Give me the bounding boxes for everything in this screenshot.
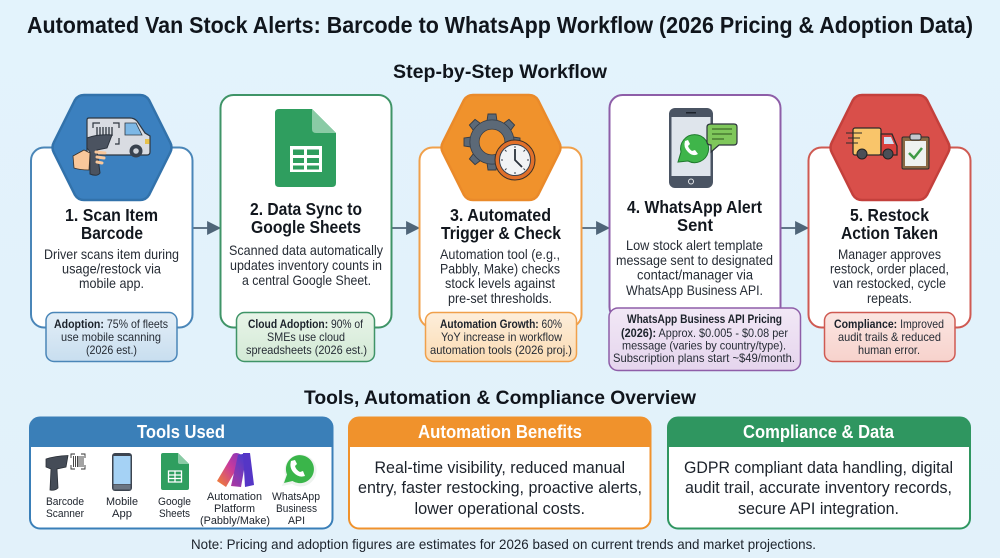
heading: step-by-step workflow: Step-by-Step Workflow (393, 61, 608, 83)
panel: tools used (30, 418, 332, 528)
text: step 5 description: van restocked, cycle (833, 276, 946, 291)
icon: barcode scanner (46, 454, 85, 490)
label: google sheets (158, 496, 191, 520)
label: whatsapp business api: Business (276, 503, 317, 515)
callout: adoption: Adoption: 75% of fleets (54, 317, 168, 331)
heading: automation benefits: Automation Benefits (418, 422, 582, 442)
arrow: step 2 to 3 (392, 222, 418, 234)
callout: whatsapp pricing: (2026): Approx. $0.005 - $0.08 per (621, 326, 788, 340)
panel: step 2 data sync (220, 95, 392, 362)
label: mobile app (106, 496, 138, 520)
text: automation benefits: Real-time visibility, reduced manual (374, 458, 625, 477)
callout: adoption (46, 312, 177, 362)
label: automation platform (200, 491, 270, 527)
callout: cloud adoption: Cloud Adoption: 90% of (248, 317, 364, 331)
label: barcode scanner: Barcode (46, 496, 84, 508)
text: step 1 description: usage/restock via (62, 262, 161, 276)
icon: google sheets (275, 109, 336, 187)
text: automation benefits (358, 458, 642, 518)
callout: automation growth: YoY increase in workflow (441, 330, 562, 344)
text: step 1 description: mobile app. (79, 276, 144, 291)
text: step 2 description (229, 243, 383, 288)
arrow: step 4 to 5 (781, 222, 807, 234)
icon: google sheets small (161, 453, 189, 490)
heading: step 5: 5. Restock (850, 205, 929, 225)
panel: step 2 data sync: Google Sheets (251, 217, 361, 237)
label: mobile app: Mobile (106, 496, 138, 508)
callout: compliance: audit trails & reduced (838, 330, 941, 344)
text: step 3 description (440, 247, 560, 306)
label: google sheets: Google (158, 496, 191, 508)
text: automation benefits: lower operational costs. (414, 499, 585, 518)
heading: step 3: 3. Automated (450, 205, 551, 225)
callout: cloud adoption: spreadsheets (2026 est.) (246, 343, 367, 357)
footnote: Note: Pricing and adoption figures are estimates for 2026 based on current trends and market projections. (191, 537, 816, 552)
text: compliance and data: audit trail, accurate inventory records, (685, 478, 952, 497)
label: automation platform: Automation (207, 491, 262, 503)
label: mobile app: App (112, 508, 132, 520)
callout: cloud adoption (236, 312, 374, 362)
label: whatsapp business api: API (288, 515, 305, 527)
text: step 3 description: pre-set thresholds. (448, 291, 552, 306)
callout: compliance: human error. (858, 343, 920, 357)
panel: step 4 whatsapp alert: Sent (677, 215, 713, 235)
panel: step 1 scan item barcode: Barcode (81, 223, 143, 243)
text: step 5 description: repeats. (867, 291, 912, 306)
panel: step 5 restock action (808, 95, 970, 362)
text: step 1 description: Driver scans item during (44, 247, 179, 262)
panel: step 3 automated trigger (420, 95, 582, 362)
panel: step 5 restock action: Action Taken (841, 223, 938, 243)
icon: automation platform logo (217, 453, 254, 487)
text: compliance and data: GDPR compliant data handling, digital (684, 458, 953, 477)
text: step 4 description: Low stock alert template (626, 238, 763, 253)
callout: whatsapp pricing (609, 308, 800, 370)
label: whatsapp business api: WhatsApp (272, 491, 320, 503)
heading: step 1: 1. Scan Item (65, 205, 158, 225)
icon: blue hexagon (52, 95, 172, 200)
label: automation platform: (Pabbly/Make) (200, 515, 270, 527)
arrow: step 1 to 2 (193, 222, 219, 234)
text: step 3 description: Pabbly, Make) checks (440, 262, 560, 276)
text: step 4 description: WhatsApp Business API. (626, 283, 763, 298)
callout: whatsapp pricing: WhatsApp Business API Pricing (627, 312, 782, 326)
heading: tools overview: Tools, Automation & Compliance Overview (304, 387, 697, 409)
text: step 1 description (44, 247, 179, 291)
text: step 2 description: a central Google Sheet. (242, 273, 371, 288)
heading: tools used: Tools Used (137, 422, 225, 442)
panel: automation benefits (349, 418, 650, 528)
text: step 5 description (830, 247, 949, 306)
callout: automation growth (426, 312, 576, 362)
icon: gear and clock (464, 114, 535, 180)
text: compliance and data: secure API integration. (738, 499, 899, 518)
label: automation platform: Platform (214, 503, 255, 515)
panel: step 3 automated trigger: Trigger & Check (441, 223, 561, 243)
text: step 3 description: Automation tool (e.g., (440, 247, 560, 262)
panel: step 1 scan item barcode (31, 95, 192, 362)
text: automation benefits: entry, faster restocking, proactive alerts, (358, 478, 642, 497)
label: whatsapp business api (272, 491, 320, 527)
text: step 4 description: message sent to designated (616, 253, 773, 268)
callout: whatsapp pricing: message (varies by country/type). (622, 338, 786, 352)
icon: mobile app phone (112, 453, 132, 491)
label: barcode scanner: Scanner (46, 508, 84, 520)
panel: compliance and data (668, 418, 970, 528)
icon: whatsapp logo (282, 454, 317, 486)
icon: phone with whatsapp and chat bubble (669, 108, 737, 188)
callout: compliance (824, 312, 955, 362)
text: step 2 description: Scanned data automatically (229, 243, 383, 258)
text: step 4 description (616, 238, 773, 298)
label: barcode scanner (46, 496, 84, 520)
icon: red hexagon (830, 95, 950, 200)
heading: step 2: 2. Data Sync to (250, 199, 362, 219)
heading: step 4: 4. WhatsApp Alert (627, 197, 762, 217)
panel: step 4 whatsapp alert (609, 95, 800, 370)
callout: whatsapp pricing: Subscription plans start ~$49/month. (613, 351, 795, 365)
icon: orange hexagon (442, 95, 560, 200)
callout: automation growth: automation tools (2026 proj.) (430, 343, 572, 357)
callout: compliance: Compliance: Improved (834, 317, 944, 331)
text: step 2 description: updates inventory counts in (230, 258, 382, 273)
arrow: step 3 to 4 (582, 222, 608, 234)
text: compliance and data (684, 458, 953, 518)
callout: adoption: (2026 est.) (86, 343, 137, 357)
text: step 3 description: stock levels against (445, 276, 555, 291)
text: step 5 description: restock, order placed, (830, 262, 949, 276)
callout: automation growth: Automation Growth: 60% (440, 317, 562, 331)
icon: van with barcode scanner (73, 118, 150, 175)
callout: cloud adoption: SMEs use cloud (267, 330, 345, 344)
icon: delivery truck and clipboard (846, 128, 929, 169)
text: step 4 description: contact/manager via (637, 268, 753, 282)
heading: compliance and data: Compliance & Data (743, 422, 895, 442)
text: step 5 description: Manager approves (838, 247, 941, 262)
callout: adoption: use mobile scanning (61, 330, 161, 344)
label: google sheets: Sheets (159, 508, 190, 520)
